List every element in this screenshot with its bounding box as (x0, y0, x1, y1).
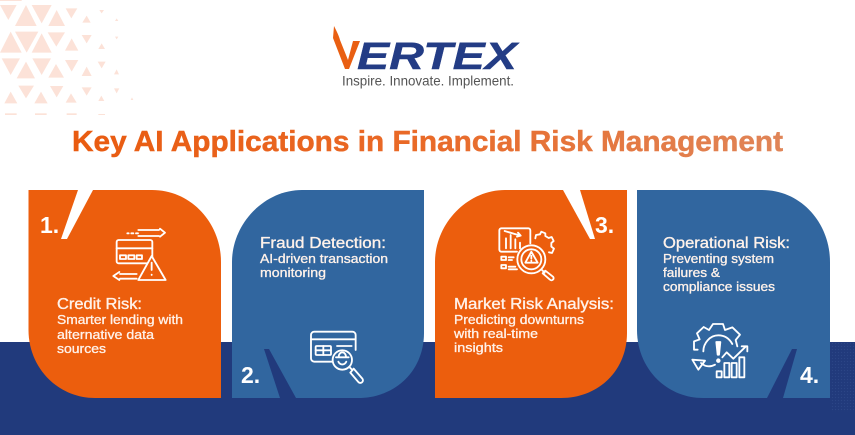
icon: card under magnifier (311, 332, 363, 383)
panel: credit risk (28, 190, 221, 398)
text block: compliance issues (663, 280, 775, 294)
text block (260, 235, 388, 280)
text block (453, 296, 614, 355)
notch (264, 349, 296, 398)
text block: Predicting downturns (454, 313, 584, 327)
text block: failures & (663, 266, 721, 280)
number: 1. (40, 212, 59, 238)
text block: alternative data (57, 328, 154, 342)
notch (767, 349, 797, 398)
text block: Credit Risk: (57, 296, 142, 313)
text block: Fraud Detection: (260, 235, 386, 252)
navy band (0, 342, 855, 435)
text block: Preventing system (663, 252, 774, 266)
panel: fraud detection (232, 190, 424, 398)
dotted band accent (830, 342, 855, 412)
logo mark: V (333, 26, 360, 69)
text block: insights (454, 341, 503, 355)
text block: Market Risk Analysis: (454, 296, 614, 313)
icon: gear with alert and chart (692, 324, 747, 377)
text block: AI-driven transaction (260, 252, 388, 266)
logo tagline: Inspire. Innovate. Implement. (342, 72, 514, 88)
logo wordmark: ERTEX (357, 36, 520, 78)
text block: with real-time (453, 327, 538, 341)
notch (563, 190, 595, 239)
icon: credit card warning (113, 229, 166, 280)
panel: market risk analysis (435, 190, 627, 398)
card shape (637, 190, 830, 398)
number: 2. (241, 362, 260, 388)
text block: Operational Risk: (663, 235, 790, 252)
text block: Smarter lending with (57, 313, 183, 327)
text block (663, 235, 790, 294)
text block: sources (57, 342, 106, 356)
number: 3. (595, 212, 614, 238)
card shape (435, 190, 627, 398)
title: Key AI Applications in Financial Risk Management (72, 126, 783, 158)
number: 4. (800, 362, 819, 388)
text block (57, 296, 183, 356)
logo (333, 26, 520, 88)
card shape (28, 190, 221, 398)
background triangle pattern (0, 0, 133, 115)
card shape (232, 190, 424, 398)
icon: chart magnifier and gear (499, 228, 554, 280)
text block: monitoring (260, 266, 326, 280)
notch (61, 190, 93, 239)
panel: operational risk (637, 190, 830, 398)
